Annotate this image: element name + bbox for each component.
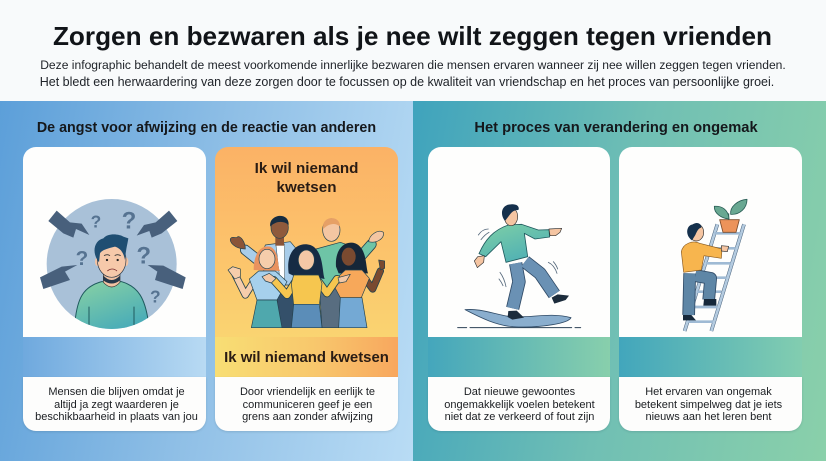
card 4 caption: betekent simpelweg dat je iets xyxy=(635,399,782,411)
card 2 caption xyxy=(215,377,398,431)
header band xyxy=(0,0,826,101)
card 1: afwijzing illustration xyxy=(23,147,206,337)
intro text: Het bledt een herwaardering van deze zorgen door te focussen op de kwaliteit van vriendschap en het proces van persoonlijke groei. xyxy=(40,74,774,88)
card 3 caption: Dat nieuwe gewoontes xyxy=(464,386,575,398)
question marks: ? xyxy=(122,207,136,234)
card 1 caption: beschikbaarheid in plaats van jou xyxy=(35,411,198,423)
question marks: ? xyxy=(136,243,151,270)
card 4 caption xyxy=(619,377,802,431)
hands xyxy=(48,211,89,238)
card 3 caption: niet dat ze verkeerd of fout zijn xyxy=(445,411,594,423)
intro text xyxy=(40,58,786,88)
title: Zorgen en bezwaren als je nee wilt zeggen tegen vrienden xyxy=(53,21,772,51)
icon: worried person with pointing hands xyxy=(40,199,186,335)
panel: het proces van verandering xyxy=(413,101,826,461)
card 2: orange card xyxy=(215,147,398,377)
question marks: ? xyxy=(76,247,88,270)
card 4 caption: Het ervaren van ongemak xyxy=(645,386,772,398)
card 1 caption xyxy=(23,377,206,431)
panel: de angst voor afwijzing xyxy=(0,101,413,461)
card 3: balance illustration xyxy=(428,147,610,337)
icon: group of friends xyxy=(228,216,385,328)
icon: person balancing on board xyxy=(458,204,581,328)
card 3 gap band xyxy=(428,337,610,377)
panel heading left: De angst voor afwijzing en de reactie van anderen xyxy=(37,120,376,136)
right woman xyxy=(336,243,368,273)
back right man xyxy=(362,244,371,255)
panel heading right: Het proces van verandering en ongemak xyxy=(474,120,758,136)
question marks: ? xyxy=(150,286,161,306)
card 4: ladder illustration xyxy=(619,147,802,337)
card 2 heading xyxy=(255,160,358,196)
card 1 gap band xyxy=(23,337,206,377)
card 2 caption: Door vriendelijk en eerlijk te xyxy=(240,386,375,398)
question marks: ? xyxy=(91,211,101,231)
card 2 heading: kwetsen xyxy=(277,178,336,196)
card 2 heading: Ik wil niemand xyxy=(255,160,358,177)
card 1 caption: altijd ja zegt waarderen je xyxy=(54,399,179,411)
card 1 caption: Mensen die blijven omdat je xyxy=(48,386,185,398)
banner: ik wil niemand kwetsen: Ik wil niemand kwetsen xyxy=(224,350,389,366)
card 2 caption: grens aan zonder afwijzing xyxy=(242,411,373,423)
card 3 caption xyxy=(428,377,610,431)
back left man xyxy=(245,250,262,263)
icon: person climbing ladder to plant xyxy=(681,199,747,331)
question marks xyxy=(76,207,161,306)
card 2 caption: communiceren geef je een xyxy=(243,399,372,411)
card 3 caption: ongemakkelijk voelen betekent xyxy=(444,399,595,411)
card 4 caption: nieuws aan het leren bent xyxy=(646,411,771,423)
intro text: Deze infographic behandelt de meest voorkomende innerlijke bezwaren die mensen ervaren wanneer zij nee willen zeggen tegen vrienden. xyxy=(40,58,786,72)
card 4 gap band xyxy=(619,337,802,377)
banner: ik wil niemand kwetsen xyxy=(215,337,398,377)
center woman xyxy=(288,244,325,279)
left woman xyxy=(254,246,280,271)
